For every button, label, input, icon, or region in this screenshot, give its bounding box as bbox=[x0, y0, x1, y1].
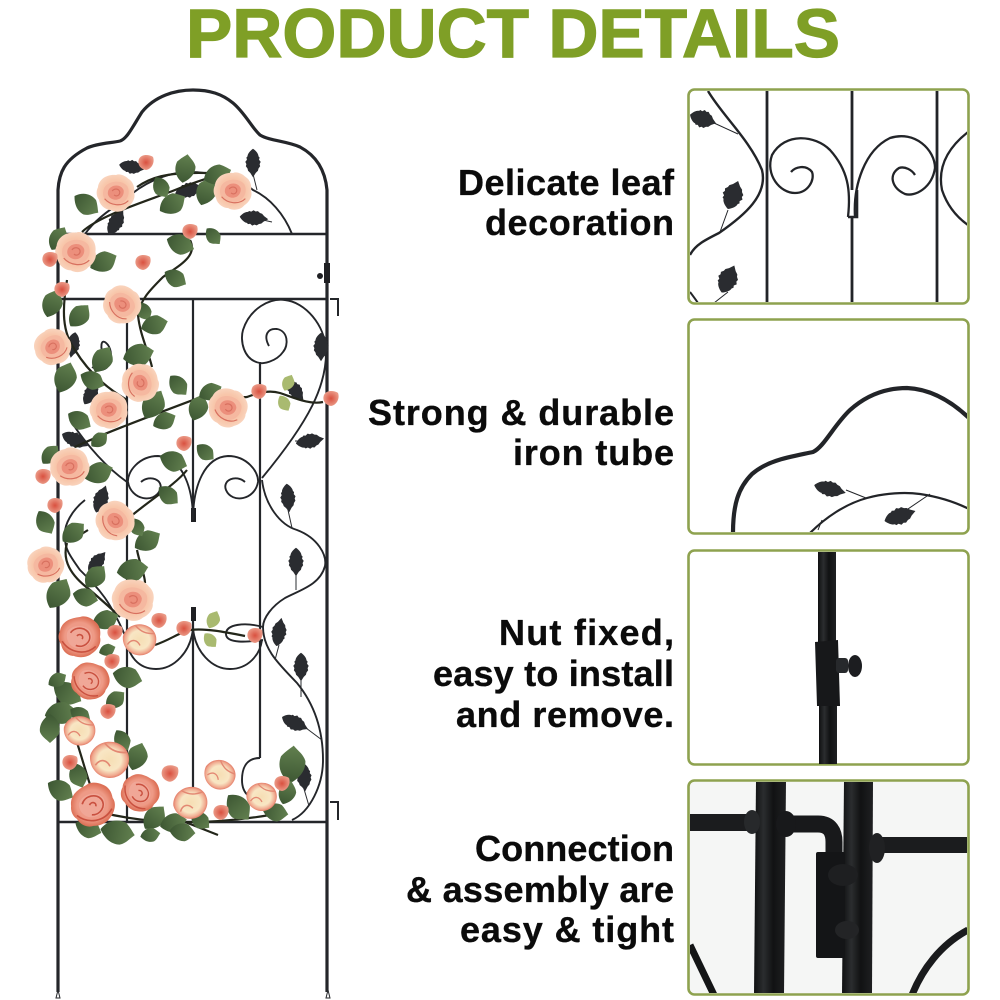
label: connection: easy & tight bbox=[460, 909, 674, 950]
panel 2 leaves bbox=[814, 480, 916, 526]
trellis iron frame bbox=[56, 90, 338, 998]
panel 2 arch tube bbox=[733, 388, 969, 533]
label: nut fixed: Nut fixed, bbox=[499, 612, 674, 653]
label: nut fixed: easy to install bbox=[433, 653, 674, 694]
label: iron tube: Strong & durable bbox=[368, 392, 674, 433]
label: connection bbox=[406, 828, 674, 950]
panel: leaf decoration detail bbox=[687, 89, 968, 304]
trellis knob and spike details bbox=[191, 263, 330, 621]
label: nut fixed: and remove. bbox=[456, 694, 674, 735]
panel: connection detail bbox=[688, 780, 968, 995]
product illustration: rose trellis bbox=[22, 90, 339, 998]
label: connection: Connection bbox=[475, 828, 674, 869]
panel 1 leaves bbox=[690, 110, 744, 292]
trellis scrollwork bbox=[65, 172, 326, 820]
label: leaf decoration bbox=[458, 162, 675, 243]
panel: iron tube detail bbox=[688, 320, 969, 534]
roses bbox=[22, 172, 277, 833]
label: iron tube bbox=[368, 392, 674, 473]
label: leaf decoration: Delicate leaf bbox=[458, 162, 675, 203]
panel: nut detail bbox=[688, 550, 968, 766]
label: connection: & assembly are bbox=[406, 869, 674, 910]
rose buds bbox=[35, 155, 339, 820]
panel 4 tubes and latch bbox=[690, 781, 968, 995]
label: leaf decoration: decoration bbox=[485, 202, 674, 243]
rose vines bbox=[58, 172, 323, 835]
label: nut fixed bbox=[433, 612, 674, 735]
rose leaves bbox=[31, 153, 307, 847]
panel 1 ironwork bbox=[687, 89, 968, 303]
panel 3 tube and knob bbox=[815, 552, 862, 766]
trellis black leaves bbox=[59, 149, 329, 806]
label: iron tube: iron tube bbox=[513, 432, 674, 473]
